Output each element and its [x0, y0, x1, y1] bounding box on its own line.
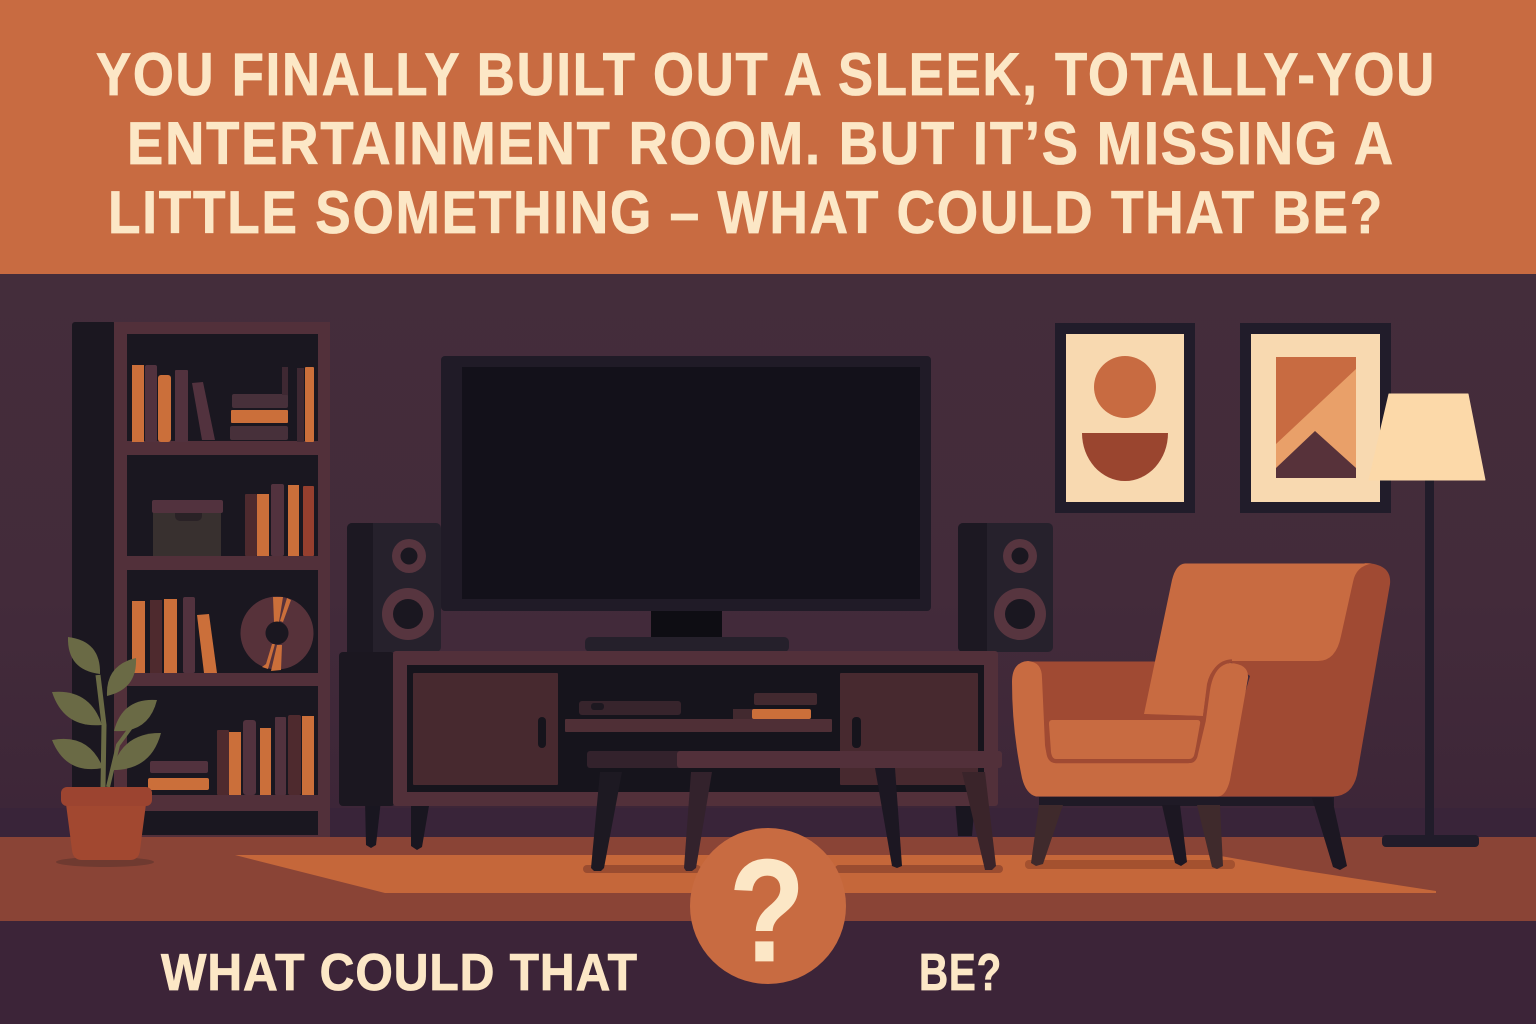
- plant stem and leaves: [52, 637, 161, 788]
- question mark badge: ?: [729, 829, 805, 992]
- books: second shelf: [245, 484, 314, 556]
- chair cushion: [1049, 720, 1200, 759]
- bookshelf: [72, 322, 330, 837]
- wall art right: [1240, 323, 1391, 513]
- chair dark body: [1215, 563, 1390, 796]
- title line 2: ENTERTAINMENT ROOM. BUT IT’S MISSING A: [127, 110, 1395, 177]
- chair back panel: [1144, 564, 1372, 716]
- wall art left: [1055, 323, 1195, 513]
- side cabinet with legs: [339, 652, 975, 850]
- plant shadow: [56, 857, 154, 867]
- question mark badge: [690, 828, 846, 992]
- tv frame: [441, 356, 931, 611]
- chair seam: [1046, 661, 1232, 762]
- storage box: [152, 500, 223, 556]
- console right door: [840, 673, 978, 785]
- books: bottom shelf: [148, 715, 314, 795]
- left speaker: [347, 523, 441, 652]
- console left door: [413, 673, 558, 785]
- chair inner side: [1030, 661, 1215, 775]
- television: [441, 356, 931, 652]
- tv stand: [651, 610, 722, 638]
- console books: [733, 693, 817, 719]
- baseboard: [0, 808, 1536, 838]
- media player: [579, 701, 681, 715]
- floor: [0, 837, 1536, 922]
- coffee table: [587, 751, 1002, 871]
- flower pot: [61, 787, 152, 860]
- title line 3: LITTLE SOMETHING – WHAT COULD THAT BE?: [108, 179, 1384, 246]
- books: third shelf: [132, 597, 217, 673]
- footer band: [0, 921, 1536, 1024]
- chair arms and base: [1012, 661, 1248, 796]
- header banner: [0, 0, 1536, 274]
- media console: [393, 651, 998, 806]
- right speaker: [958, 523, 1053, 652]
- books: top shelf: [132, 365, 314, 442]
- footer text right: BE?: [919, 944, 1002, 1002]
- armchair: [1012, 563, 1390, 870]
- tv screen: [462, 367, 920, 599]
- potted plant: [52, 637, 161, 867]
- console shelf: [565, 719, 832, 732]
- rug: [235, 855, 1436, 893]
- vinyl record: [240, 596, 314, 671]
- footer text left: WHAT COULD THAT: [161, 944, 638, 1002]
- chair legs: [1031, 797, 1347, 870]
- floor lamp: [1369, 394, 1485, 847]
- soundbar: [585, 637, 789, 652]
- wall background: [0, 274, 1536, 810]
